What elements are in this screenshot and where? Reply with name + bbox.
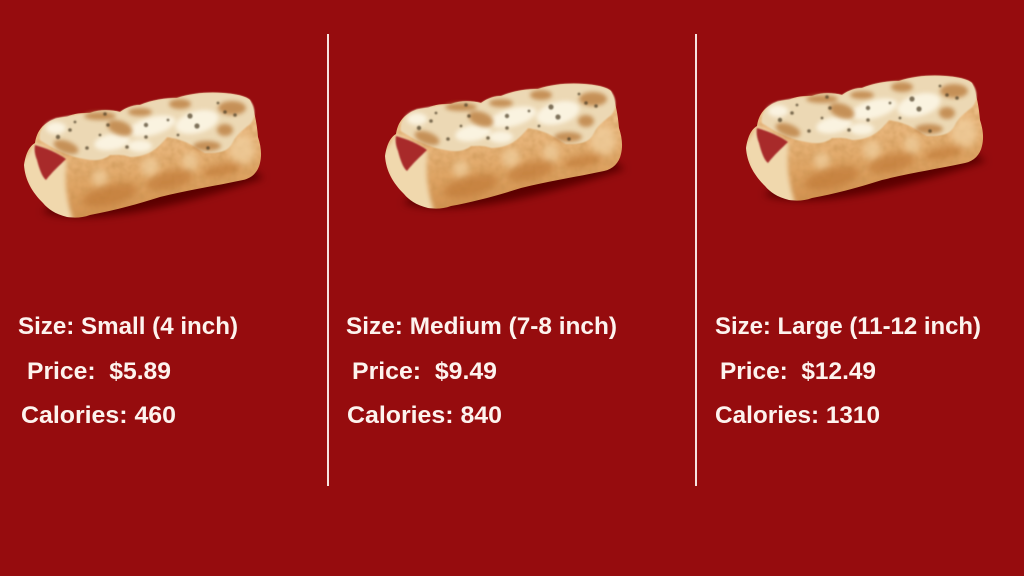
image: medium bread — [381, 81, 626, 213]
divider: right — [695, 34, 697, 486]
text: medium calories: Calories: 840 — [347, 402, 502, 429]
text: small size label: Size: Small (4 inch) — [18, 313, 238, 340]
infographic canvas — [18, 34, 986, 486]
panel: medium size — [346, 81, 626, 429]
text: large size label: Size: Large (11-12 inch) — [715, 313, 981, 340]
panel: large size — [715, 73, 987, 429]
text: large calories: Calories: 1310 — [715, 402, 880, 429]
text: small calories: Calories: 460 — [21, 402, 176, 429]
text: small price: Price: $5.89 — [27, 358, 171, 385]
image: small bread — [20, 90, 265, 222]
image: large bread — [742, 73, 987, 205]
text: large price: Price: $12.49 — [720, 358, 876, 385]
text: medium size label: Size: Medium (7-8 inch) — [346, 313, 617, 340]
text: medium price: Price: $9.49 — [352, 358, 497, 385]
divider: left — [327, 34, 329, 486]
panel: small size — [18, 90, 265, 429]
